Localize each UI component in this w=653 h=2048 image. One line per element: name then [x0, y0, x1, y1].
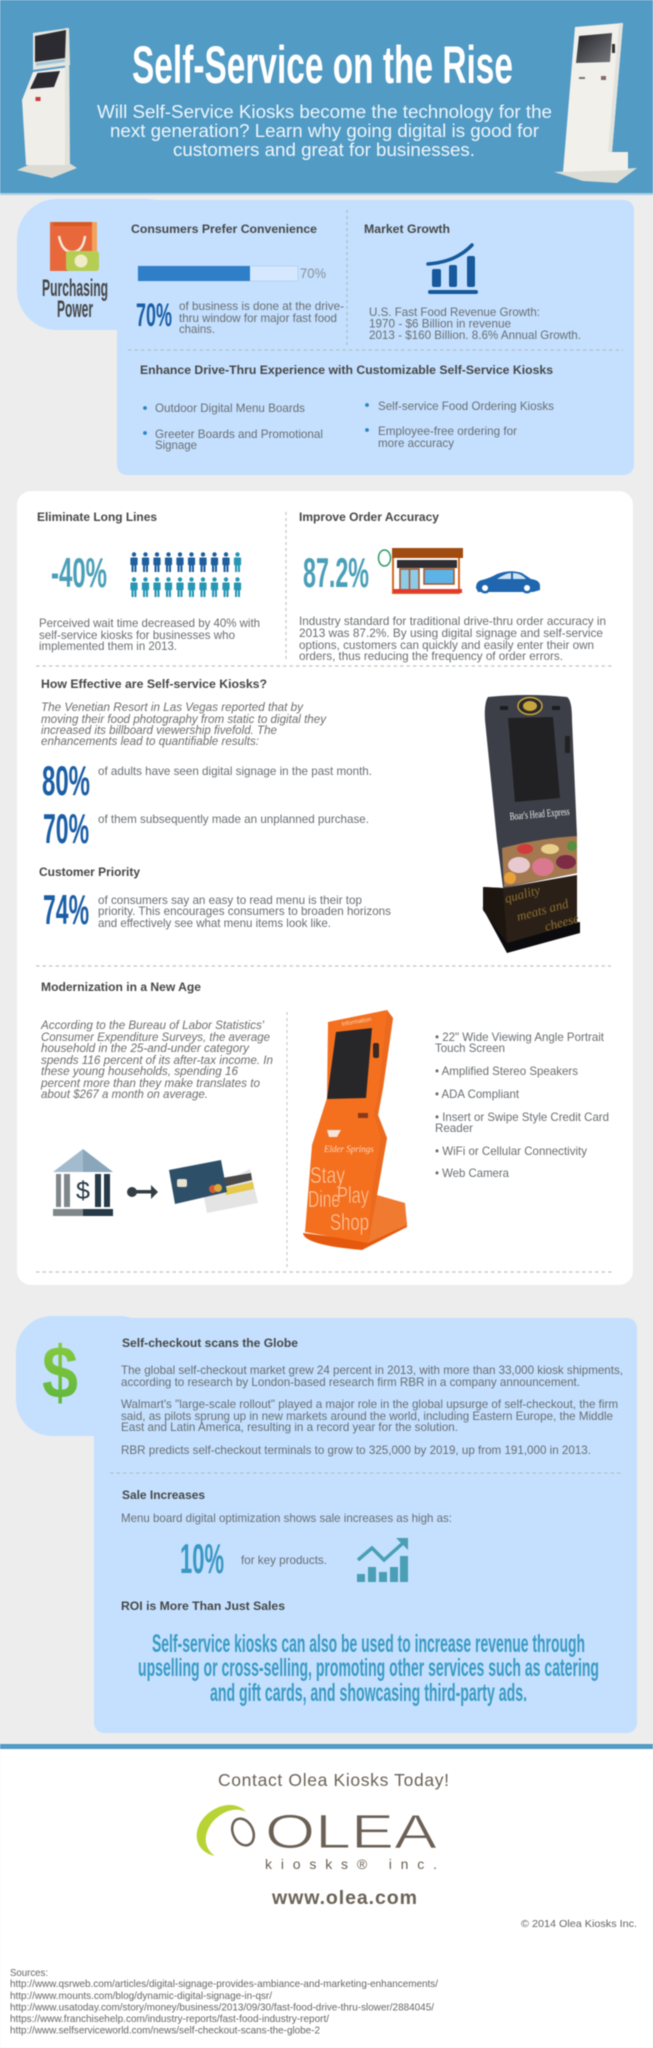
heading: enhance drive-thru: Enhance Drive-Thru Experience with Customizable Self-Service Kiosks: [140, 363, 553, 377]
stat: 70 percent: [43, 805, 369, 852]
text: order accuracy: Industry standard for traditional drive-thru order accuracy in: [299, 614, 606, 628]
panel: kiosk benefits: [17, 491, 633, 1285]
sources: https://www.franchisehelp.com/industry-reports/fast-food-industry-report/: [10, 2013, 329, 2025]
stat: 10 percent: [180, 1535, 327, 1582]
heading: sale increases: Sale Increases: [122, 1488, 205, 1502]
text: wait time: Perceived wait time decreased by 40% with: [39, 616, 260, 630]
text: wait time: self-service kiosks for businesses who: [39, 628, 235, 642]
list: kiosk features: • Insert or Swipe Style Credit Card: [435, 1110, 609, 1124]
stat: 70 percent of business: [136, 297, 344, 336]
header banner: [0, 0, 653, 195]
heading: market growth: Market Growth: [364, 222, 450, 236]
icon: bank: [53, 1149, 113, 1216]
heading: how effective: How Effective are Self-service Kiosks?: [41, 677, 267, 691]
logo: olea kiosks: [197, 1805, 437, 1872]
text: bureau of labor statistics: household in the 25-and-under category: [41, 1041, 250, 1055]
stat: 80 percent: [42, 757, 372, 804]
list: kiosk features: • ADA Compliant: [435, 1087, 520, 1101]
text: order accuracy: options, customers can quickly and easily enter their own: [299, 638, 594, 652]
list: drive-thru options: Self-service Food Ordering Kiosks: [378, 399, 554, 413]
stat: 70 percent of business: thru window for major fast food: [179, 311, 337, 325]
image: orange kiosk: Play: [337, 1182, 369, 1208]
website: www.olea.com: [271, 1887, 417, 1909]
stat: 70 percent of business: of business is done at the drive-: [179, 299, 344, 313]
text: bureau of labor statistics: spends 116 percent of its after-tax income. In: [41, 1053, 273, 1067]
stat: minus 40 percent: -40%: [51, 549, 107, 596]
list: kiosk features: • WiFi or Cellular Connectivity: [435, 1144, 587, 1158]
bar chart: 70 percent: [138, 265, 326, 281]
callout: upselling: [138, 1630, 599, 1707]
text: self-checkout market: RBR predicts self-checkout terminals to grow to 325,000 by 2019, up from 191,000 in 2013.: [121, 1443, 591, 1457]
icon: shopping bag: [50, 222, 99, 271]
stat: 80 percent: 80%: [42, 757, 90, 804]
icon: growth chart: [428, 245, 478, 294]
text: bureau of labor statistics: these young households, spending 16: [41, 1064, 238, 1078]
stat: 74 percent: and effectively see what menu items look like.: [98, 916, 331, 930]
heading: consumers prefer convenience: Consumers Prefer Convenience: [131, 222, 317, 236]
list: kiosk features: Reader: [435, 1121, 473, 1135]
text: self-checkout market: [121, 1363, 623, 1457]
text: self-checkout market: said, as pilots sprung up in new markets around the world, including Eastern Europe, the Middle: [121, 1409, 613, 1423]
list: drive-thru options: Greeter Boards and Promotional: [155, 427, 323, 441]
text: bureau of labor statistics: percent more than they make translates to: [40, 1076, 260, 1090]
icon: drive-thru store: [392, 548, 463, 593]
panel: self-checkout and sales: [16, 1316, 637, 1733]
icon: credit cards: [169, 1160, 258, 1213]
heading: self-checkout: Self-checkout scans the Globe: [122, 1336, 298, 1350]
heading: customer priority: Customer Priority: [39, 865, 140, 879]
text: order accuracy: 2013 was 87.2%. By using digital signage and self-service: [299, 626, 603, 640]
heading: improve order accuracy: Improve Order Accuracy: [299, 510, 439, 524]
stat: 70 percent of business: chains.: [179, 322, 215, 336]
copyright: © 2014 Olea Kiosks Inc.: [521, 1918, 637, 1930]
list: kiosk features: • Amplified Stereo Speakers: [435, 1064, 578, 1078]
text: self-checkout market: Walmart's "large-scale rollout" played a major role in the global upsurge of self-checkout, the firm: [121, 1397, 618, 1411]
text: bureau of labor statistics: about $267 a month on average.: [41, 1087, 208, 1101]
stat: 74 percent: priority. This encourages consumers to broaden horizons: [98, 904, 391, 918]
icon: dollar sign: $: [42, 1331, 78, 1414]
heading: eliminate long lines: Eliminate Long Lines: [37, 510, 157, 524]
text: revenue growth: [369, 305, 581, 342]
list: drive-thru options: Outdoor Digital Menu Boards: [155, 401, 305, 415]
heading: roi: ROI is More Than Just Sales: [121, 1599, 285, 1613]
panel label: purchasing power: Purchasing: [42, 275, 108, 302]
arrow: bank to cards: [127, 1185, 158, 1199]
text: menu board optimization: Menu board digital optimization shows sale increases as high as:: [121, 1511, 452, 1525]
text: wait time: [39, 616, 260, 653]
list: kiosk features: Touch Screen: [435, 1041, 505, 1055]
subtitle: [97, 102, 552, 160]
sources: http://www.mounts.com/blog/dynamic-digital-signage-in-qsr/: [10, 1990, 272, 2002]
list: kiosk features: [435, 1030, 609, 1180]
footer: [0, 1744, 653, 2048]
stat: 70 percent of business: 70%: [136, 297, 172, 333]
list: kiosk features: • Web Camera: [435, 1166, 509, 1180]
stat: 74 percent: of consumers say an easy to read menu is their top: [98, 893, 362, 907]
stat: 87.2 percent: 87.2%: [303, 549, 369, 596]
list: drive-thru options: [143, 399, 554, 452]
list: drive-thru options: more accuracy: [378, 436, 454, 450]
text: revenue growth: 2013 - $160 Billion. 8.6% Annual Growth.: [369, 328, 581, 342]
icon: car: [476, 571, 540, 594]
logo: olea kiosks: OLEA: [265, 1806, 437, 1859]
panel label: purchasing power: [42, 275, 108, 323]
list: drive-thru options: Employee-free ordering for: [378, 424, 517, 438]
sources: [10, 1967, 438, 2036]
text: venetian resort: enhancements lead to quantifiable results:: [41, 734, 259, 748]
sources: http://www.qsrweb.com/articles/digital-signage-provides-ambiance-and-marketing-enhancements/: [10, 1978, 438, 1990]
text: venetian resort: The Venetian Resort in Las Vegas reported that by: [41, 700, 304, 714]
image: orange kiosk: Elder Springs: [323, 1144, 374, 1154]
image: black deli kiosk: cheese: [543, 910, 580, 934]
text: revenue growth: 1970 - $6 Billion in revenue: [369, 316, 511, 330]
stat: 70 percent: of them subsequently made an unplanned purchase.: [98, 812, 369, 826]
image: orange kiosk: Information: [341, 1017, 372, 1028]
panel label: purchasing power: Power: [57, 296, 93, 323]
text: revenue growth: U.S. Fast Food Revenue Growth:: [369, 305, 540, 319]
stat: 80 percent: of adults have seen digital signage in the past month.: [98, 764, 372, 778]
icon: right kiosk: [554, 23, 637, 183]
icon: people rows: [130, 552, 241, 597]
text: bureau of labor statistics: Consumer Expenditure Surveys, the average: [41, 1030, 270, 1044]
image: orange kiosk: [303, 1010, 407, 1250]
stat: 70 percent: 70%: [43, 805, 89, 852]
image: black deli kiosk: meats and: [515, 896, 571, 924]
subtitle: Will Self-Service Kiosks become the technology for the: [97, 102, 552, 122]
text: order accuracy: orders, thus reducing the frequency of order errors.: [299, 649, 563, 663]
text: venetian resort: increased its billboard viewership fivefold. The: [41, 723, 277, 737]
image: orange kiosk: Stay: [310, 1162, 345, 1188]
contact heading: Contact Olea Kiosks Today!: [218, 1770, 449, 1790]
image: orange kiosk: Dine: [308, 1186, 340, 1212]
icon: rising sales chart: [357, 1538, 408, 1582]
text: bureau of labor statistics: [40, 1018, 273, 1101]
image: black deli kiosk: quality: [503, 882, 542, 906]
sources: Sources:: [10, 1967, 48, 1979]
heading: modernization: Modernization in a New Age: [41, 980, 201, 994]
sources: http://www.usatoday.com/story/money/business/2013/09/30/fast-food-drive-thru-slower/2884045/: [10, 2002, 434, 2014]
stat: 74 percent: 74%: [43, 886, 89, 933]
text: wait time: implemented them in 2013.: [39, 639, 177, 653]
icon: letter o ring: [378, 550, 390, 566]
text: self-checkout market: East and Latin America, resulting in a record year for the solution.: [121, 1420, 458, 1434]
text: self-checkout market: The global self-checkout market grew 24 percent in 2013, with more than 33,000 kiosk shipments,: [121, 1363, 623, 1377]
subtitle: customers and great for businesses.: [173, 140, 475, 160]
image: black deli kiosk: [482, 695, 580, 953]
logo: olea kiosks: kiosks® inc.: [265, 1856, 437, 1872]
sources: http://www.selfserviceworld.com/news/self-checkout-scans-the-globe-2: [10, 2024, 320, 2036]
list: kiosk features: • 22" Wide Viewing Angle Portrait: [435, 1030, 605, 1044]
panel: purchasing power: [17, 199, 634, 475]
stat: 10 percent: for key products.: [241, 1553, 327, 1567]
stat: 10 percent: 10%: [180, 1535, 224, 1582]
image: black deli kiosk: Boar's Head Express: [509, 806, 570, 823]
bar chart: 70 percent: 70%: [300, 265, 326, 281]
text: self-checkout market: according to research by London-based research firm RBR in a company announcement.: [121, 1375, 580, 1389]
text: venetian resort: moving their food photography from static to digital they: [41, 712, 327, 726]
text: bureau of labor statistics: According to the Bureau of Labor Statistics': [40, 1018, 265, 1032]
list: drive-thru options: Signage: [155, 438, 197, 452]
image: orange kiosk: Shop: [330, 1209, 369, 1235]
subtitle: next generation? Learn why going digital is good for: [110, 121, 539, 141]
icon: bank: $: [76, 1177, 90, 1205]
text: venetian resort: [41, 700, 327, 748]
text: order accuracy: [299, 614, 606, 663]
stat: 74 percent: [43, 886, 391, 933]
icon: left kiosk: [17, 28, 77, 178]
